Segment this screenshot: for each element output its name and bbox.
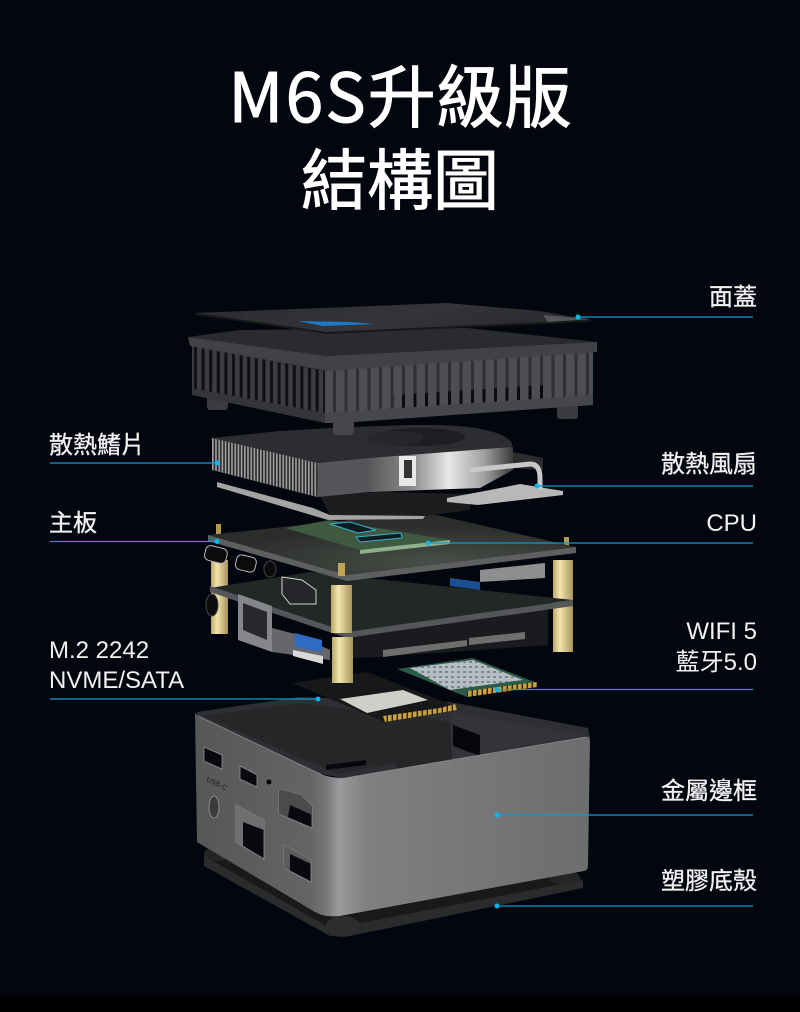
illustration: metal frame case [195, 697, 590, 916]
label: WIFI and Bluetooth: WIFI 5 [686, 618, 757, 645]
front standoff [331, 585, 352, 633]
illustration: plastic bottom shell [204, 847, 583, 937]
leader lines [50, 317, 753, 906]
illustration: top board [203, 512, 576, 683]
illustration: cover body [188, 328, 597, 435]
illustration: heatsink and fan [212, 425, 563, 520]
illustration: WiFi card [397, 658, 537, 697]
illustration: lower board [206, 563, 573, 664]
illustration: top lid [195, 303, 591, 334]
bottom black band [0, 996, 800, 1012]
case port cutouts [204, 747, 312, 882]
leader dots [214, 314, 580, 908]
label: M.2 storage: M.2 2242 [49, 637, 149, 664]
title line 1: M6S升級版 [228, 43, 572, 142]
label: heatsink fins: 散熱鰭片 [49, 432, 145, 459]
label: mainboard: 主板 [49, 510, 97, 537]
USB port [272, 628, 330, 660]
ports [203, 545, 228, 564]
illustration: SSD [292, 672, 457, 722]
label: CPU: CPU [706, 510, 757, 537]
label: plastic base: 塑膠底殼 [661, 868, 757, 895]
label: M.2 storage: NVME/SATA [49, 667, 184, 694]
illustration: standoffs rear [211, 524, 573, 652]
case port labels: USB-C [205, 776, 228, 792]
CPU board [285, 520, 450, 550]
title line 2: 結構圖 [301, 128, 499, 224]
label: M.2 storage [49, 637, 184, 694]
label: top panel: 面蓋 [709, 284, 757, 311]
case outer walls [195, 713, 590, 916]
label: WIFI and Bluetooth [676, 618, 757, 676]
RJ45 port [238, 594, 272, 652]
label: WIFI and Bluetooth: 藍牙5.0 [676, 649, 757, 676]
label: cooling fan: 散熱風扇 [661, 451, 757, 478]
label: metal frame: 金屬邊框 [661, 778, 757, 805]
